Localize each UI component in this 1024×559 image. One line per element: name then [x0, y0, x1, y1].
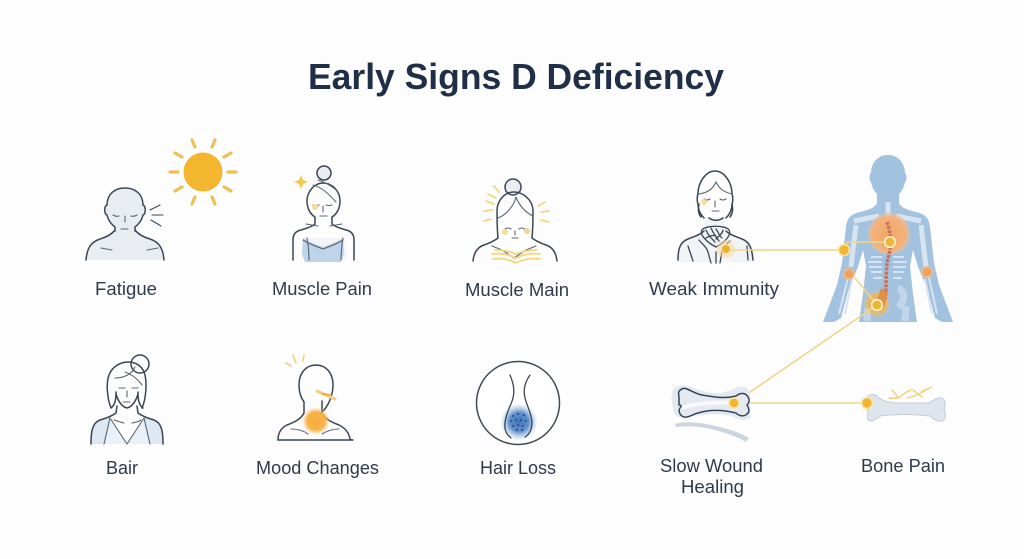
label: mood changes: Mood Changes — [256, 457, 379, 478]
icon: woman reading with rays — [473, 179, 557, 263]
panel: mood changes — [256, 355, 379, 478]
label: bair: Bair — [106, 457, 138, 478]
icon: fatigued person — [86, 188, 164, 260]
label: hair loss: Hair Loss — [480, 457, 556, 478]
spine — [885, 222, 891, 301]
title: Early Signs D Deficiency — [308, 56, 724, 97]
panel: bair — [91, 355, 163, 478]
panel: slow wound healing — [660, 386, 763, 497]
panel: muscle pain — [272, 166, 372, 299]
icon: woman holding hands at chest — [678, 171, 753, 263]
label: slow wound healing — [660, 455, 763, 497]
label: slow wound healing: Slow Wound — [660, 455, 763, 476]
icon: hair follicle circle — [476, 362, 560, 444]
icon: sun — [170, 140, 236, 204]
label: muscle main: Muscle Main — [465, 279, 569, 300]
icon: fractured bone — [671, 386, 751, 442]
skeleton — [839, 202, 937, 321]
label: weak immunity: Weak Immunity — [649, 278, 780, 299]
pain spot: right elbow — [922, 267, 932, 277]
connector lines — [726, 242, 890, 403]
panel: fatigue — [86, 188, 164, 299]
panel: bone pain — [861, 387, 945, 476]
panel: muscle main — [465, 179, 569, 300]
marker nodes — [717, 237, 895, 310]
label: fatigue: Fatigue — [95, 278, 157, 299]
label: muscle pain: Muscle Pain — [272, 278, 372, 299]
icon: head and neck with glow — [278, 355, 353, 440]
body silhouette — [823, 155, 953, 322]
icon: woman with side bun — [91, 355, 163, 444]
pain spot: left elbow — [844, 269, 854, 279]
panel: weak immunity — [649, 171, 780, 299]
pain area: chest — [868, 213, 910, 255]
icon: bone with pain marks — [862, 387, 945, 421]
label: bone pain: Bone Pain — [861, 455, 945, 476]
panel: body diagram — [823, 155, 953, 322]
icon: woman with hair bun — [293, 166, 354, 262]
panel: hair loss — [476, 362, 560, 478]
label: slow wound healing: Healing — [681, 476, 744, 497]
pain area: hip — [863, 288, 891, 318]
